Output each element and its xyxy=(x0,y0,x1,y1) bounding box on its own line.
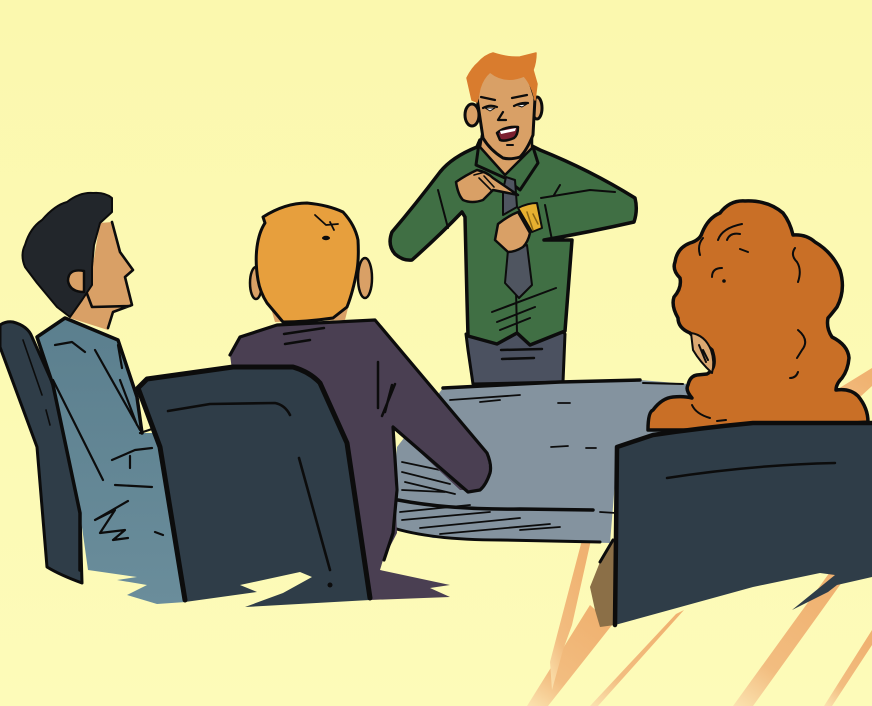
hair whorl xyxy=(315,215,338,230)
neck xyxy=(270,300,350,322)
brown chair base xyxy=(590,537,615,627)
chair back xyxy=(615,423,872,625)
face xyxy=(70,222,133,330)
jacket xyxy=(230,320,490,600)
right ear xyxy=(532,97,542,119)
woman with curly hair xyxy=(648,201,868,430)
standing man xyxy=(390,53,636,384)
jacket creases xyxy=(284,328,395,416)
neck xyxy=(480,130,532,175)
right foreground chair xyxy=(590,423,872,627)
raised hand xyxy=(495,212,530,252)
blue shirt xyxy=(37,318,186,604)
seated man in blue shirt xyxy=(22,193,186,604)
seated man in purple jacket xyxy=(230,203,491,600)
trousers xyxy=(466,328,565,384)
sun rays xyxy=(527,368,872,706)
eyes, brows, nose xyxy=(481,95,528,120)
dark hair xyxy=(22,193,112,317)
cheek xyxy=(691,333,713,373)
open mouth xyxy=(497,127,518,141)
face xyxy=(477,66,535,159)
trouser creases xyxy=(501,349,542,359)
left ear xyxy=(465,104,479,126)
ears xyxy=(250,267,262,299)
pointing hand xyxy=(456,170,518,202)
necktie xyxy=(503,177,532,298)
hair xyxy=(467,53,537,102)
gold watch xyxy=(518,203,542,232)
middle chair xyxy=(138,367,370,607)
shirt folds xyxy=(53,342,163,540)
table xyxy=(390,380,700,543)
hair curl lines xyxy=(692,224,805,421)
green shirt xyxy=(390,140,636,345)
ear xyxy=(68,270,84,292)
orange hair xyxy=(256,203,358,322)
left chair xyxy=(0,322,82,583)
curly hair xyxy=(648,201,868,430)
